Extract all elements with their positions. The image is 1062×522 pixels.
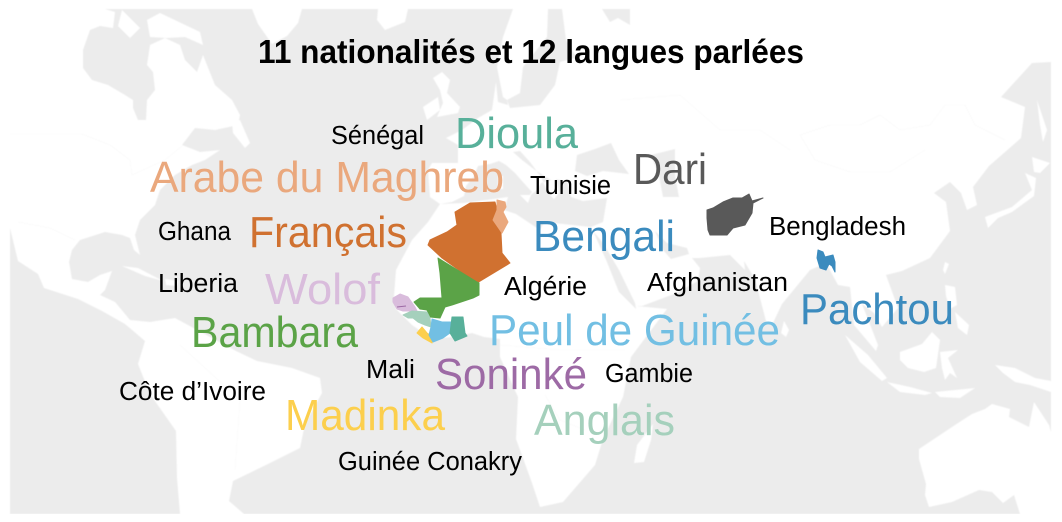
Caspian Sea [651, 149, 679, 197]
Mediterranean Sea [440, 151, 607, 230]
Black Sea [575, 143, 629, 176]
Persian Gulf [655, 231, 689, 259]
country: Bangladesh [817, 250, 835, 272]
country: Côte d'Ivoire [429, 319, 452, 342]
country label: Côte d'Ivoire: Côte d’Ivoire [119, 378, 266, 406]
inland and enclosed seas [440, 9, 689, 309]
the Americas [0, 0, 322, 514]
language: Dari: Dari [633, 145, 707, 194]
country label: Algérie: Algérie [504, 273, 587, 301]
Africa and Eurasia [394, 0, 1062, 507]
island cut-outs in the Mediterranean [498, 176, 531, 203]
language: Wolof: Wolof [265, 265, 381, 314]
country: Afghanistan [707, 194, 763, 235]
country label: Liberia: Liberia [158, 270, 239, 298]
White Sea [602, 9, 630, 25]
country label: Afghanistan: Afghanistan [647, 269, 788, 297]
country label: Ghana: Ghana [158, 218, 232, 246]
language: Bengali: Bengali [533, 212, 675, 261]
country: Mali [414, 258, 479, 318]
language: Pachtou: Pachtou [800, 285, 954, 334]
islands [118, 9, 1051, 463]
Baltic Sea [507, 9, 585, 108]
country label: Gambie: Gambie [605, 360, 693, 388]
country: Tunisia [493, 200, 508, 233]
language: Arabe du Maghreb: Arabe du Maghreb [150, 153, 504, 202]
language: Anglais: Anglais [534, 396, 675, 445]
country: Senegal [393, 294, 417, 311]
language: Peul de Guinée: Peul de Guinée [489, 306, 780, 355]
country label: Bengladesh: Bengladesh [769, 213, 906, 241]
country label: Mali: Mali [366, 356, 415, 384]
country label: Guinée Conakry: Guinée Conakry [338, 448, 522, 476]
Red Sea [593, 231, 636, 309]
title: 11 nationalités et 12 langues parlées [258, 33, 804, 70]
country label: Tunisie: Tunisie [530, 172, 611, 200]
country: Liberia [417, 327, 433, 343]
language: Madinka: Madinka [285, 391, 446, 440]
country: Ghana [450, 317, 467, 341]
country: Algeria [428, 202, 510, 283]
country label: Sénégal: Sénégal [331, 122, 424, 150]
language: Français: Français [249, 208, 407, 257]
Australia [919, 402, 1062, 514]
country: Guinea [403, 311, 431, 327]
country: Gambia [397, 306, 406, 307]
language: Dioula: Dioula [455, 109, 579, 158]
language: Soninké: Soninké [435, 350, 587, 399]
language: Bambara: Bambara [191, 308, 358, 357]
